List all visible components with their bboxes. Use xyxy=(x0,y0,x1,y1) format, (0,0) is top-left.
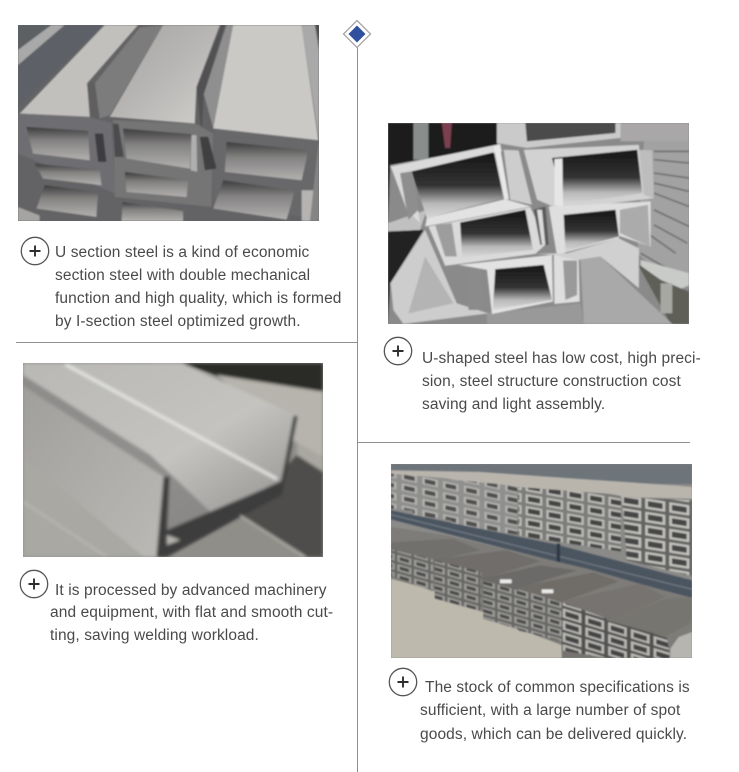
icon: plus in circle xyxy=(384,336,412,366)
icon: plus in circle xyxy=(388,668,418,696)
text block: goods, which can be delivered quickly. xyxy=(420,726,687,743)
panel: first description xyxy=(20,236,342,330)
icon: plus in circle xyxy=(20,236,50,266)
text block xyxy=(420,679,690,743)
icon: plus in circle xyxy=(20,570,48,598)
icon: blue diamond marker xyxy=(342,20,372,48)
divider: central vertical line xyxy=(357,46,358,772)
panel: third description xyxy=(20,570,333,644)
photo: U channel stack front view xyxy=(388,123,689,324)
text block xyxy=(422,350,701,413)
text block: sion, steel structure construction cost xyxy=(422,373,681,390)
text block: The stock of common specifications is xyxy=(425,679,690,696)
text block: section steel with double mechanical xyxy=(55,267,310,284)
panel: fourth description xyxy=(388,668,690,743)
text block xyxy=(50,582,333,644)
text block: saving and light assembly. xyxy=(422,396,605,413)
text block: and equipment, with flat and smooth cut- xyxy=(50,604,333,621)
photo: warehouse racks of U channel stock xyxy=(391,464,692,658)
text block xyxy=(55,244,342,330)
text block: sufficient, with a large number of spot xyxy=(420,702,680,719)
panel: second description xyxy=(384,336,701,413)
text block: It is processed by advanced machinery xyxy=(55,582,327,599)
text block: function and high quality, which is formed xyxy=(55,290,342,307)
text block: U section steel is a kind of economic xyxy=(55,244,309,261)
divider: right horizontal line xyxy=(357,442,690,443)
text block: U-shaped steel has low cost, high preci- xyxy=(422,350,701,367)
divider: left horizontal line xyxy=(16,342,357,343)
text block: by I-section steel optimized growth. xyxy=(55,313,301,330)
text block: ting, saving welding workload. xyxy=(50,627,259,644)
photo: single U channel close-up xyxy=(23,363,323,557)
photo: stacked U channels top view xyxy=(18,25,319,221)
